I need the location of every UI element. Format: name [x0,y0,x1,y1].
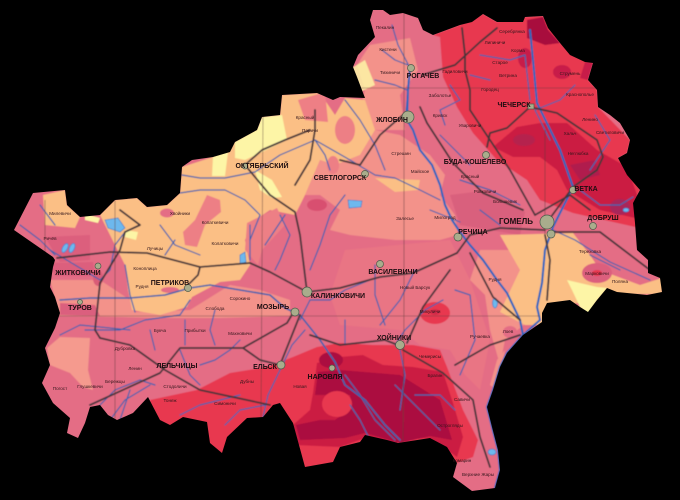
village labels: Тонеж [163,398,177,403]
city labels: ГОМЕЛЬ [499,217,533,226]
city labels: ХОЙНИКИ [377,333,411,342]
village labels: Слобода [206,306,225,311]
village labels: Савичи [454,397,470,402]
village labels: Дубны [240,379,254,384]
village labels: Брагин [428,373,443,378]
village labels: Букча [154,328,167,333]
village labels: Пекалин [376,25,395,30]
village labels: Лоев [503,329,514,334]
city labels: КАЛИНКОВИЧИ [311,293,365,300]
village labels: Уваровичи [459,123,482,128]
village labels: Городец [481,87,499,92]
village labels: Коноплица [133,266,157,271]
city labels [54,73,619,381]
village labels: Новый Барсук [400,284,431,290]
village labels: Ричёв [43,236,57,241]
village labels: Майское [411,168,430,174]
village labels: Острогляды [437,423,463,428]
village labels: Залесье [396,216,414,221]
village labels: Новая [293,384,307,389]
village labels: Светиловичи [596,130,624,135]
city labels: РЕЧИЦА [458,229,488,236]
village labels: Паричи [302,128,318,133]
village labels: Симоничи [214,401,236,406]
town markers [78,64,596,371]
village labels: Хвойники [170,210,191,216]
village labels: Прибытки [184,328,206,333]
village labels: Неглюбка [568,151,589,156]
village labels: Глушкевичи [77,384,103,389]
city labels: ЕЛЬСК [253,364,278,371]
village labels: Чемерисы [419,354,441,359]
village labels: Марковичи [585,271,609,276]
village labels: Кривск [433,113,448,118]
village labels: Милевичи [49,211,71,216]
village labels: Ровковичи [474,189,497,194]
city labels: БУДА-КОШЕЛЕВО [444,159,507,166]
city labels: ТУРОВ [68,305,92,312]
village labels: Дубровка [115,346,136,351]
village labels: Милоград [434,215,456,220]
village labels: Стодоличи [163,384,187,389]
city labels: СВЕТЛОГОРСК [314,175,367,182]
village labels: Кистени [379,47,397,52]
village labels: Липиничи [485,40,506,45]
village labels: Верхние Жары [462,472,494,477]
city labels: МОЗЫРЬ [257,304,289,311]
village labels: Сорокино [230,296,251,301]
village labels: Краснополье [566,92,594,97]
village labels: Заболотье [429,93,452,98]
village labels: Хальч [564,131,577,136]
lakes [60,200,629,455]
village labels: Ветрина [499,73,517,78]
village labels: Ленин [128,366,142,371]
village labels [43,25,628,477]
village labels: Микуличи [420,309,441,314]
village labels: Бережцы [105,379,125,384]
city labels: РОГАЧЕВ [407,73,439,80]
village labels: Рудня [136,284,149,289]
village labels: Тихиничи [380,70,400,75]
village labels: Стрешин [391,151,411,156]
city labels: ОКТЯБРЬСКИЙ [235,161,289,170]
village labels: Комарин [453,458,472,463]
city labels: ДОБРУШ [587,215,619,222]
village labels: Тереховка [579,249,601,254]
village labels: Струмень [560,71,581,76]
village labels: Погост [53,386,68,391]
village labels: Рудня [489,277,502,282]
city labels: ЖИТКОВИЧИ [54,270,101,277]
village labels: Ленино [582,117,598,122]
village labels: Красный [461,173,480,179]
city labels: ВАСИЛЕВИЧИ [368,269,418,276]
village labels: Корма [511,48,525,53]
village labels: Серебрянка [499,29,525,34]
village labels: Махновичи [228,331,252,336]
grid lines [44,13,596,442]
city labels: ПЕТРИКОВ [151,280,189,287]
village labels: Гадиловичи [442,69,468,74]
village labels: Копаткевичи [202,220,229,225]
village labels: Колатковичи [212,241,239,246]
village labels: Большевик [493,199,518,204]
village labels: Ручаевка [470,334,490,339]
city labels: ВЕТКА [574,186,598,193]
city labels: ЖЛОБИН [375,117,408,124]
village labels: Красный [296,114,315,120]
city labels: ЧЕЧЕРСК [498,102,531,109]
city labels: ЛЕЛЬЧИЦЫ [157,363,198,370]
village labels: Поляна [612,279,628,284]
village labels: Лучицы [147,246,163,251]
roads [57,28,650,467]
city labels: НАРОВЛЯ [308,374,342,381]
village labels: Старое [492,60,508,65]
